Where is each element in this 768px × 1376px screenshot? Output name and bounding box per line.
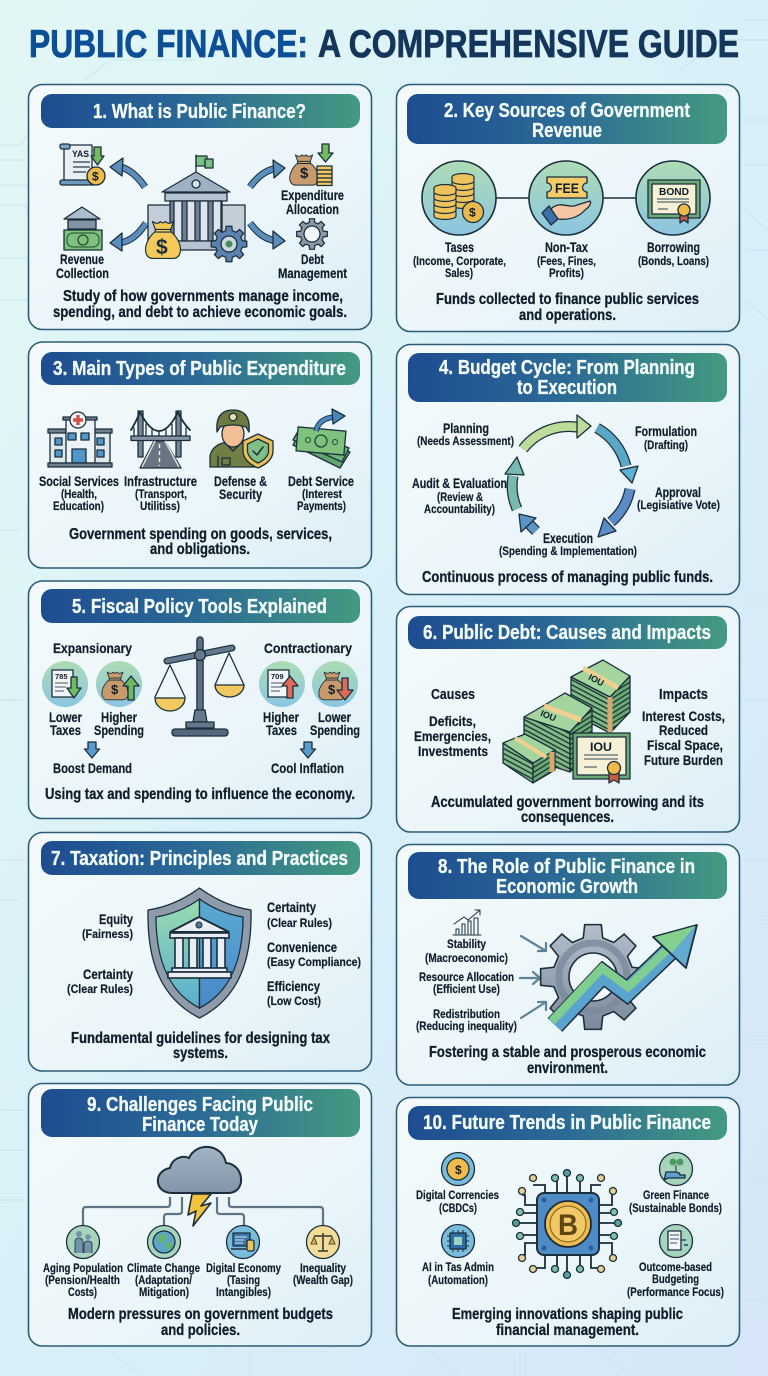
- icon: central money bag: $: [156, 236, 168, 259]
- label: debt service: Debt Service: [288, 473, 354, 489]
- icon: money bag with coins: [290, 144, 333, 186]
- label: climate change: Climate Change: [127, 1261, 200, 1275]
- label: taxes: (Income, Corporate,: [413, 254, 506, 268]
- label: causes: [414, 686, 491, 759]
- panel: 9. Challenges: [28, 1084, 372, 1346]
- caption 8: Fostering a stable and prosperous economic: [429, 1044, 706, 1061]
- icon: fee circle: [529, 161, 603, 235]
- label: planning: [417, 420, 514, 448]
- label: expansionary: Expansionary: [53, 640, 132, 656]
- label: formulation: (Drafting): [644, 438, 688, 452]
- icon: inequality scales: [306, 1226, 340, 1258]
- heading 2: [407, 94, 727, 144]
- label: approval: Approval: [655, 484, 701, 500]
- label: revenue collection: Revenue: [60, 251, 104, 267]
- icon: higher taxes: [259, 661, 305, 707]
- heading 1: [41, 94, 360, 128]
- label: non-tax: (Fees, Fines,: [537, 254, 596, 268]
- label: audit & evaluation: [412, 475, 507, 516]
- label: resource allocation: Resource Allocation: [419, 970, 514, 984]
- label: non-tax: [537, 239, 596, 280]
- panel: 4. Budget Cycle: [396, 344, 740, 594]
- caption 1: spending, and debt to achieve economic goals.: [53, 304, 347, 321]
- icon: fee circle: FEE: [555, 181, 579, 196]
- arrow: to boost demand: [84, 742, 100, 758]
- panel: 6. Public Debt: [396, 606, 740, 832]
- icon: central money bag: [146, 222, 180, 259]
- icon: digital currency: $: [455, 1163, 462, 1177]
- label: aging population: Aging Population: [43, 1261, 123, 1275]
- icon: coins circle: $: [469, 206, 476, 220]
- icon: higher spending: [96, 661, 142, 707]
- icon: chip with bitcoin coin: B: [558, 1209, 578, 1242]
- icon: digital economy: [226, 1226, 260, 1258]
- icon: debt money stacks with IOU: IOU: [590, 742, 612, 754]
- label: convenience: (Easy Compliance): [267, 955, 361, 969]
- heading 7: [41, 841, 360, 875]
- icon: small growth chart: [453, 910, 481, 935]
- label: debt management: Debt: [301, 251, 324, 267]
- panel: 5. Fiscal Policy Tools: [28, 581, 372, 818]
- caption 1: Study of how governments manage income,: [63, 288, 343, 305]
- heading 2: 2. Key Sources of Government: [444, 99, 690, 122]
- icon: bank with banknote: [64, 207, 102, 250]
- label: planning: Planning: [443, 420, 489, 436]
- icon: chip with bitcoin coin: [537, 1193, 599, 1255]
- label: infrastructure: Infrastructure: [124, 473, 197, 489]
- arrow: to revenue collection: [110, 223, 146, 251]
- label: borrowing: Borrowing: [647, 239, 700, 255]
- icon: higher taxes: 709: [271, 672, 284, 681]
- caption 3: and obligations.: [150, 541, 250, 558]
- label: debt service: (Interest: [302, 487, 342, 501]
- label: defense & security: [214, 473, 267, 502]
- label: green finance: [629, 1188, 722, 1215]
- label: audit & evaluation: (Review &: [437, 490, 483, 504]
- icon: lower taxes: 785: [55, 672, 68, 681]
- label: digital currencies: [416, 1188, 499, 1215]
- label: infrastructure: Utilitiss): [140, 499, 180, 513]
- heading 4: 4. Budget Cycle: From Planning: [439, 356, 695, 379]
- arrows: into gear: [520, 936, 546, 1018]
- icon: lower spending: [312, 661, 358, 707]
- icon: tax document with coin: YAS: [72, 149, 89, 160]
- icon: central gear: [211, 226, 247, 262]
- label: digital economy: [206, 1261, 281, 1299]
- label: AI in tax admin: (Automation): [428, 1273, 488, 1287]
- heading 5: 5. Fiscal Policy Tools Explained: [72, 595, 327, 618]
- icon: higher spending: $: [111, 682, 119, 697]
- label: audit & evaluation: Audit & Evaluation: [412, 475, 507, 491]
- labels: lower taxes, higher spending: Higher: [101, 709, 137, 725]
- arrow: to expenditure allocation: [250, 160, 285, 187]
- label: climate change: Mitigation): [139, 1285, 189, 1299]
- heading 3: 3. Main Types of Public Expenditure: [53, 357, 346, 380]
- label: redistribution: [416, 1007, 517, 1033]
- panel: 10. Future Trends: [396, 1098, 740, 1346]
- icon: aging population: [66, 1226, 100, 1258]
- label: certainty right: [267, 899, 332, 930]
- icon: green finance: [660, 1152, 692, 1186]
- label: impacts: Interest Costs,: [642, 708, 725, 724]
- caption 6: [431, 794, 704, 826]
- arrow: to cool inflation: [300, 742, 316, 758]
- label: causes: Causes: [431, 686, 475, 703]
- caption 8: [429, 1044, 706, 1077]
- label: certainty left: (Clear Rules): [67, 982, 133, 996]
- panel: 2. Key Sources of Government Revenue: [396, 84, 740, 332]
- heading 8: [408, 852, 727, 899]
- label: equity: (Fairness): [82, 927, 133, 941]
- heading 5: [41, 589, 360, 623]
- label: certainty right: Certainty: [267, 899, 316, 915]
- label: non-tax: Profits): [549, 266, 584, 280]
- icon: AI chip: [442, 1224, 474, 1258]
- icon: bond circle: BOND: [659, 186, 689, 198]
- icon: digital currency: [442, 1152, 474, 1186]
- label: borrowing: (Bonds, Loans): [638, 254, 709, 268]
- heading 9: Finance Today: [142, 1113, 258, 1136]
- label: convenience: [267, 939, 361, 969]
- label: redistribution: (Reducing inequality): [416, 1019, 517, 1033]
- label: debt service: [288, 473, 354, 513]
- label: social services: Social Services: [39, 473, 119, 489]
- label: expenditure allocation: Allocation: [286, 201, 339, 217]
- arrow: to debt management: [250, 223, 285, 249]
- labels: lower taxes, higher spending: Lower: [49, 709, 82, 725]
- title: PUBLIC FINANCE:: [29, 23, 308, 66]
- caption 10: Emerging innovations shaping public: [452, 1306, 683, 1323]
- label: stability: [425, 937, 508, 965]
- heading 8: 8. The Role of Public Finance in: [438, 855, 695, 878]
- labels: higher taxes, lower spending: [263, 709, 360, 738]
- caption 10: [452, 1306, 683, 1339]
- label: equity: [82, 911, 133, 941]
- label: formulation: [635, 423, 697, 452]
- label: approval: [637, 484, 720, 512]
- icon: debt money stacks with IOU: IOU: [587, 672, 606, 688]
- caption 6: consequences.: [521, 809, 614, 826]
- icon: gear with rising arrow: [541, 925, 697, 1029]
- label: infrastructure: (Transport,: [135, 487, 187, 501]
- caption 7: [71, 1030, 330, 1062]
- icon: outcome-based budgeting: [660, 1224, 692, 1258]
- heading 10: [408, 1106, 727, 1140]
- label: green finance: (Sustainable Bonds): [629, 1201, 722, 1215]
- caption 2: [436, 291, 699, 324]
- icon: debt money stacks with IOU: [503, 660, 630, 783]
- heading 9: 9. Challenges Facing Public: [87, 1093, 313, 1116]
- label: certainty right: (Clear Rules): [267, 916, 332, 930]
- label: AI in tax admin: AI in Tas Admin: [422, 1260, 494, 1274]
- label: expenditure allocation: [281, 187, 344, 217]
- label: formulation: Formulation: [635, 423, 697, 439]
- icon: lower spending: $: [328, 682, 336, 697]
- heading 6: 6. Public Debt: Causes and Impacts: [423, 621, 711, 644]
- label: inequality: [293, 1261, 353, 1287]
- label: aging population: Costs): [68, 1285, 97, 1299]
- label: equity: Equity: [99, 911, 133, 927]
- caption 9: Modern pressures on government budgets: [68, 1306, 333, 1323]
- label: causes: Emergencies,: [414, 728, 491, 744]
- connectors: cloud to challenges: [83, 1197, 323, 1226]
- label: approval: (Legisiative Vote): [637, 498, 720, 512]
- label: causes: Investments: [418, 743, 488, 759]
- heading 10: 10. Future Trends in Public Finance: [423, 1111, 711, 1134]
- label: causes: Deficits,: [429, 713, 476, 729]
- label: impacts: Impacts: [659, 686, 708, 703]
- icon: storm cloud: [158, 1147, 241, 1226]
- label: taxes: Sales): [445, 266, 473, 280]
- label: aging population: [43, 1261, 123, 1299]
- icon: soldier with shield: [210, 410, 273, 468]
- label: borrowing: [638, 239, 709, 268]
- icon: circuit traces: [512, 1170, 622, 1278]
- label: digital currencies: (CBDCs): [439, 1201, 477, 1215]
- label: taxes: [413, 239, 506, 280]
- heading 7: 7. Taxation: Principles and Practices: [51, 847, 348, 870]
- caption 1: [53, 288, 347, 321]
- icon: shield with temple: [148, 888, 251, 1018]
- title: [29, 23, 739, 66]
- label: inequality: (Wealth Gap): [293, 1273, 353, 1287]
- icon: tax document with coin: [60, 144, 105, 185]
- label: impacts: [642, 686, 725, 768]
- labels: lower taxes, higher spending: Taxes: [50, 722, 81, 738]
- label: convenience: Convenience: [267, 939, 337, 955]
- caption 9: and policies.: [161, 1322, 240, 1339]
- panel: 3. Main Types of Public Expenditure: [28, 342, 372, 568]
- label: AI in tax admin: [422, 1260, 494, 1287]
- label: defense & security: Security: [219, 486, 262, 502]
- label: social services: [39, 473, 119, 513]
- label: taxes: Tases: [445, 239, 474, 255]
- panel: 8. Role in Economic Growth: [396, 844, 740, 1085]
- caption 8: environment.: [527, 1060, 608, 1077]
- labels: lower taxes, higher spending: [49, 709, 144, 738]
- chart: budget cycle arrows: [505, 415, 638, 537]
- caption 5: Using tax and spending to influence the economy.: [45, 786, 355, 803]
- label: certainty left: [67, 966, 133, 996]
- label: efficiency: [267, 978, 321, 1008]
- label: execution: Execution: [543, 530, 593, 546]
- label: digital economy: Intangibles): [216, 1285, 271, 1299]
- label: audit & evaluation: Accountability): [424, 502, 495, 516]
- icon: bridge: [131, 411, 190, 468]
- label: impacts: Fiscal Space,: [647, 737, 723, 753]
- label: debt management: Management: [278, 265, 347, 281]
- label: social services: (Health,: [61, 487, 97, 501]
- icon: debt money stacks with IOU: IOU: [539, 708, 558, 723]
- heading 8: Economic Growth: [496, 875, 638, 898]
- heading 9: [41, 1089, 360, 1137]
- icon: debt gear: [297, 219, 327, 249]
- labels: higher taxes, lower spending: Spending: [310, 722, 360, 738]
- label: digital economy: (Tasing: [227, 1273, 260, 1287]
- label: outcome-based budgeting: Budgeting: [652, 1272, 699, 1286]
- label: non-tax: Non-Tax: [545, 239, 588, 255]
- icon: climate globe: [148, 1226, 180, 1258]
- label: outcome-based budgeting: (Performance Focus): [627, 1285, 724, 1299]
- label: aging population: (Pension/Health: [45, 1273, 120, 1287]
- label: inequality: Inequality: [300, 1261, 346, 1275]
- label: boost demand: Boost Demand: [53, 760, 132, 776]
- heading 3: [41, 352, 360, 385]
- label: outcome-based budgeting: Outcome-based: [639, 1260, 712, 1274]
- caption 3: [69, 526, 332, 558]
- heading 4: [408, 353, 727, 402]
- label: revenue collection: [56, 251, 109, 281]
- heading 4: to Execution: [517, 376, 617, 399]
- label: climate change: [127, 1261, 200, 1299]
- caption 6: Accumulated government borrowing and its: [431, 794, 704, 811]
- label: resource allocation: (Efficient Use): [433, 982, 500, 996]
- heading 2: Revenue: [532, 119, 602, 142]
- caption 2: and operations.: [519, 307, 616, 324]
- label: efficiency: Efficiency: [267, 978, 320, 994]
- panel: 1. What is Public Finance?: [28, 84, 372, 330]
- labels: higher taxes, lower spending: Taxes: [266, 722, 297, 738]
- arrow: to tax document: [110, 158, 145, 187]
- label: green finance: Green Finance: [643, 1188, 709, 1202]
- caption 4: Continuous process of managing public funds.: [422, 569, 713, 586]
- panel: 7. Taxation: [28, 832, 372, 1071]
- icon: tax document with coin: $: [92, 170, 99, 184]
- caption 7: systems.: [173, 1045, 228, 1062]
- label: impacts: Reduced: [659, 722, 708, 738]
- heading 6: [408, 616, 727, 649]
- labels: higher taxes, lower spending: Lower: [318, 709, 351, 725]
- label: execution: [499, 530, 637, 558]
- label: outcome-based budgeting: [627, 1260, 724, 1299]
- icon: coins circle: [422, 161, 496, 235]
- icon: banknotes with arrow: [293, 409, 350, 468]
- label: digital economy: Digital Economy: [206, 1261, 281, 1275]
- heading 1: 1. What is Public Finance?: [93, 100, 306, 123]
- label: debt management: [278, 251, 347, 281]
- icon: money bag with coins: $: [300, 165, 309, 182]
- icon: balance scale: [155, 640, 244, 736]
- label: stability: (Macroeconomic): [425, 951, 508, 965]
- label: contractionary: Contractionary: [264, 640, 352, 656]
- label: digital currencies: Digital Correncies: [416, 1188, 499, 1202]
- caption 10: financial management.: [496, 1322, 639, 1339]
- label: social services: Education): [53, 499, 104, 513]
- label: resource allocation: [419, 970, 514, 996]
- icon: central government building: [148, 155, 245, 250]
- caption 9: [68, 1306, 333, 1339]
- label: expenditure allocation: Expenditure: [281, 187, 344, 203]
- icon: bond circle: [636, 161, 710, 235]
- label: infrastructure: [124, 473, 197, 513]
- labels: higher taxes, lower spending: Higher: [263, 709, 299, 725]
- label: impacts: Future Burden: [644, 752, 723, 768]
- label: defense & security: Defense &: [214, 473, 267, 489]
- label: planning: (Needs Assessment): [417, 434, 514, 448]
- caption 3: Government spending on goods, services,: [69, 526, 332, 543]
- label: debt service: Payments): [297, 499, 346, 513]
- caption 7: Fundamental guidelines for designing tax: [71, 1030, 330, 1047]
- label: stability: Stability: [447, 937, 486, 951]
- icon: lower taxes: [42, 661, 88, 707]
- label: redistribution: Redistribution: [433, 1007, 500, 1021]
- label: efficiency: (Low Cost): [267, 994, 321, 1008]
- label: climate change: (Adaptation/: [135, 1273, 192, 1287]
- label: cool inflation: Cool Inflation: [271, 760, 344, 776]
- caption 2: Funds collected to finance public services: [436, 291, 699, 308]
- label: certainty left: Certainty: [83, 966, 133, 982]
- icon: hospital: [48, 412, 112, 467]
- label: revenue collection: Collection: [56, 265, 109, 281]
- labels: lower taxes, higher spending: Spending: [94, 722, 144, 738]
- label: execution: (Spending & Implementation): [499, 544, 637, 558]
